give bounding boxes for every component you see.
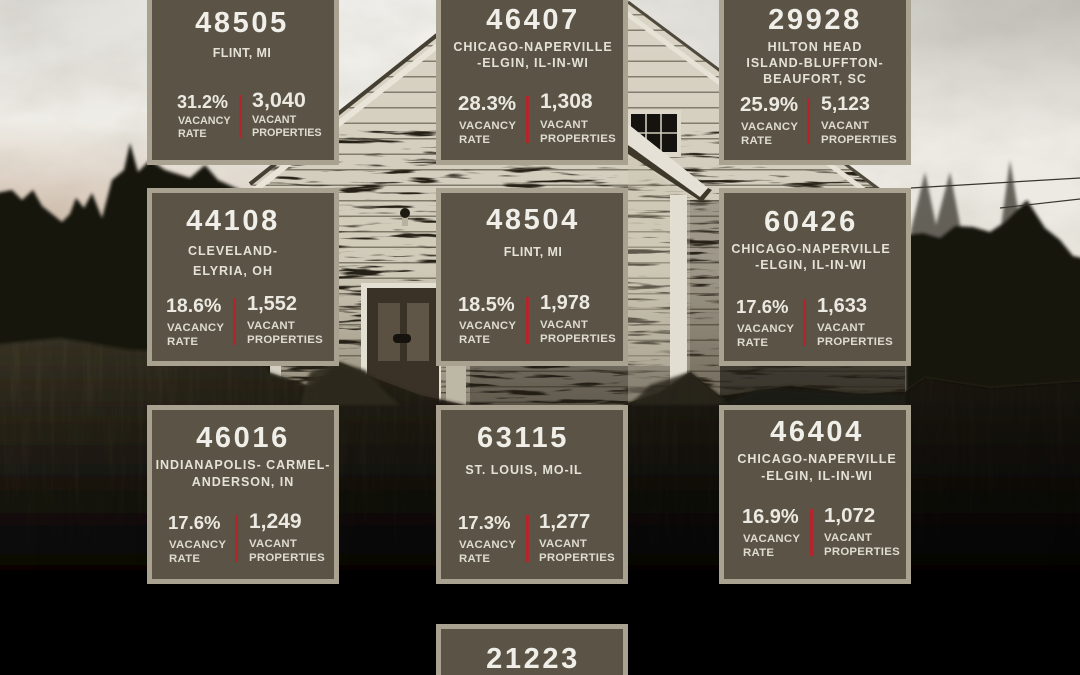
bottom black fade <box>0 585 1080 675</box>
card panel <box>441 0 623 160</box>
vacant properties value: 5,123 <box>821 93 870 115</box>
metro area: -ELGIN, IL-IN-WI <box>755 258 867 272</box>
vacant properties value: 1,633 <box>817 295 867 317</box>
window <box>628 110 681 157</box>
vacant properties label: PROPERTIES <box>247 334 323 346</box>
vacancy rate label: VACANCY <box>741 121 798 133</box>
vacancy rate label <box>741 121 798 147</box>
metro area <box>731 242 891 272</box>
zip code: 44108 <box>186 205 280 237</box>
vacant properties label: PROPERTIES <box>540 333 616 345</box>
vacancy rate label <box>459 539 516 565</box>
metro area <box>156 458 330 489</box>
metro area: CHICAGO-NAPERVILLE <box>731 242 891 256</box>
card: 48504 Flint <box>436 188 628 366</box>
corner post <box>270 366 281 406</box>
red divider <box>803 299 806 346</box>
card: 46404 Chicago <box>719 405 911 584</box>
vacancy rate value: 18.5% <box>458 294 515 316</box>
vacant properties label: PROPERTIES <box>539 552 615 564</box>
zip code: 29928 <box>768 4 862 36</box>
vacant properties label: VACANT <box>817 322 865 334</box>
post by door <box>446 366 466 406</box>
vacant properties label: VACANT <box>247 320 295 332</box>
vacant properties label: VACANT <box>252 114 296 126</box>
vacant properties label: PROPERTIES <box>540 133 616 145</box>
metro area: -ELGIN, IL-IN-WI <box>477 56 589 70</box>
vacancy rate label: VACANCY <box>737 323 794 335</box>
vacancy rate label: RATE <box>737 337 768 349</box>
vacancy rate label: RATE <box>178 128 207 140</box>
vacant properties label: PROPERTIES <box>824 546 900 558</box>
vacancy rate label: VACANCY <box>167 322 224 334</box>
zip code: 46407 <box>486 4 580 36</box>
vacant properties label: PROPERTIES <box>249 552 325 564</box>
vacancy rate value: 17.3% <box>458 512 510 533</box>
vacancy rate label <box>178 115 231 140</box>
vacancy rate label: RATE <box>741 135 772 147</box>
vacant properties label: PROPERTIES <box>252 127 322 139</box>
vacant properties label <box>821 120 897 146</box>
metro area <box>453 40 613 70</box>
card panel <box>441 410 623 579</box>
metro area: HILTON HEAD <box>768 40 862 54</box>
red divider <box>233 298 236 345</box>
card: 21223 <box>436 624 628 675</box>
vacancy rate value: 17.6% <box>168 512 220 533</box>
vacancy rate label: RATE <box>169 553 200 565</box>
red divider <box>810 509 813 556</box>
vacant properties value: 1,978 <box>540 292 590 314</box>
vacancy rate value: 18.6% <box>166 295 221 317</box>
metro area: ISLAND-BLUFFTON- <box>746 56 884 70</box>
card panel <box>724 193 906 361</box>
vacant properties label <box>824 532 900 558</box>
card: 29928 Hilton Head <box>719 0 911 165</box>
metro area: ST. LOUIS, MO-IL <box>465 463 583 477</box>
vacancy rate label: RATE <box>459 334 490 346</box>
vacant properties label: VACANT <box>540 319 588 331</box>
door <box>361 283 441 408</box>
vacancy rate value: 16.9% <box>742 506 799 528</box>
utility wires <box>911 178 1080 208</box>
vacancy rate value: 28.3% <box>458 92 516 115</box>
vacancy rate label <box>743 533 800 559</box>
metro area: FLINT, MI <box>213 46 271 60</box>
card: 60426 Chicago <box>719 188 911 366</box>
vacant properties label: VACANT <box>821 120 869 132</box>
zip code: 60426 <box>764 206 858 238</box>
zip code: 46016 <box>196 422 290 454</box>
trees right <box>905 160 1080 420</box>
vacant properties label <box>540 319 616 345</box>
vacancy rate label: VACANCY <box>459 320 516 332</box>
vacancy rate label: RATE <box>743 547 774 559</box>
sky <box>0 0 1080 400</box>
card: 48505 Flint <box>147 0 339 165</box>
vacant properties value: 1,277 <box>539 510 590 533</box>
porch roof <box>628 124 712 405</box>
vacant properties label: VACANT <box>824 532 872 544</box>
vacancy rate value: 17.6% <box>736 296 788 317</box>
vacancy rate label: VACANCY <box>459 120 516 132</box>
metro area: BEAUFORT, SC <box>763 72 867 86</box>
card panel <box>724 410 906 579</box>
vacancy rate label: VACANCY <box>178 115 231 127</box>
porch column <box>670 195 687 395</box>
metro area <box>746 40 884 86</box>
card: 46407 Chicago <box>436 0 628 165</box>
trees left <box>0 143 290 420</box>
zip code: 48504 <box>486 204 580 236</box>
red divider <box>526 297 529 344</box>
zip code: 46404 <box>770 416 864 448</box>
metro area: FLINT, MI <box>504 245 562 259</box>
card: 63115 St. Louis <box>436 405 628 584</box>
vacancy rate label: RATE <box>459 553 490 565</box>
vacant properties value: 1,072 <box>824 504 875 527</box>
vacant properties label <box>540 119 616 145</box>
card panel <box>152 0 334 160</box>
metro area: CLEVELAND- <box>188 244 278 258</box>
vacancy rate label <box>459 320 516 346</box>
roof edges <box>250 2 880 196</box>
card panel <box>441 193 623 361</box>
vacant properties value: 3,040 <box>252 88 306 112</box>
card: 46016 Indianapolis <box>147 405 339 584</box>
vacancy rate label: RATE <box>459 134 490 146</box>
red divider <box>239 95 242 138</box>
metro area: ELYRIA, OH <box>193 264 273 278</box>
red divider <box>526 96 529 143</box>
vacancy rate label <box>737 323 794 349</box>
vacant properties label: VACANT <box>539 538 587 550</box>
vacant properties label <box>539 538 615 564</box>
vacancy rate label: VACANCY <box>459 539 516 551</box>
vacancy rate label <box>459 120 516 146</box>
metro area: CHICAGO-NAPERVILLE <box>453 40 613 54</box>
metro area <box>737 452 897 483</box>
vacancy rate label: VACANCY <box>169 539 226 551</box>
vacancy rate label: RATE <box>167 336 198 348</box>
metro area: INDIANAPOLIS- CARMEL- <box>156 458 330 472</box>
metro area: -ELGIN, IL-IN-WI <box>761 469 873 483</box>
vacancy rate label <box>169 539 226 565</box>
metro area <box>188 244 278 278</box>
metro area: ANDERSON, IN <box>192 475 294 489</box>
card panel <box>152 193 334 361</box>
card panel <box>724 0 906 160</box>
vacant properties label: VACANT <box>249 538 297 550</box>
red divider <box>526 515 529 562</box>
vacancy rate label: VACANCY <box>743 533 800 545</box>
vacant properties label <box>247 320 323 346</box>
zip code: 21223 <box>486 643 580 675</box>
zip code: 48505 <box>195 7 289 39</box>
vacant properties value: 1,249 <box>249 510 302 533</box>
vacant properties label <box>817 322 893 348</box>
vacancy rate label <box>167 322 224 348</box>
card panel <box>441 629 623 675</box>
card: 44108 Cleveland <box>147 188 339 366</box>
vacant properties label <box>252 114 322 139</box>
vacant properties value: 1,308 <box>540 90 593 113</box>
vacant properties label: PROPERTIES <box>821 134 897 146</box>
metro area: CHICAGO-NAPERVILLE <box>737 452 897 466</box>
grass <box>0 337 1080 570</box>
vacant properties label <box>249 538 325 564</box>
house <box>240 0 920 410</box>
vacancy rate value: 25.9% <box>740 93 798 116</box>
vacant properties value: 1,552 <box>247 293 297 315</box>
red divider <box>807 98 810 144</box>
zip code: 63115 <box>477 422 569 454</box>
vacant properties label: PROPERTIES <box>817 336 893 348</box>
card panel <box>152 410 334 579</box>
vacant properties label: VACANT <box>540 119 588 131</box>
wall lamp <box>400 208 410 226</box>
red divider <box>235 515 238 562</box>
vacancy rate value: 31.2% <box>177 92 228 112</box>
